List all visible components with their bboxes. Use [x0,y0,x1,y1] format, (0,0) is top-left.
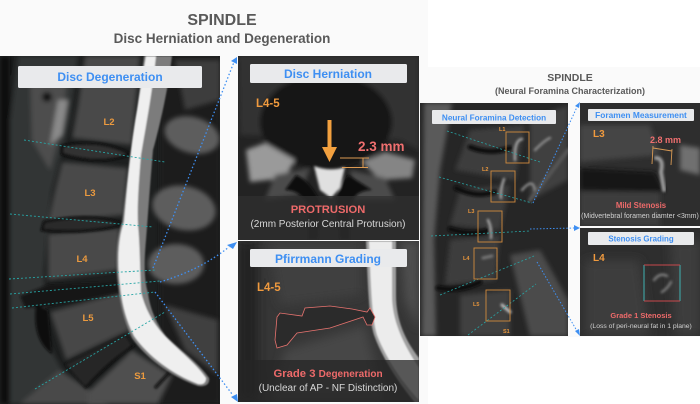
vertebrae [48,56,172,404]
vertebra labels: L5 [82,313,94,324]
caption: mild stenosis [581,201,699,220]
level labels: L1 [499,127,505,133]
main title: SPINDLE [187,12,257,29]
label: Stenosis Grading: Stenosis Grading [608,234,674,244]
main title [114,12,330,46]
panel: neural foramina MRI [420,103,568,336]
caption: grade 1 stenosis [590,311,692,330]
posterior elements [148,60,224,375]
arrows: disc panels [153,57,238,402]
caption: grade 3 [259,368,397,394]
vertebra labels: L3 [84,188,96,199]
caption: grade 1 stenosis: Grade 1 Stenosis [610,311,672,320]
measurement 2.3 mm: 2.3 mm [358,139,405,154]
caption: grade 3: Grade 3 Degeneration [273,368,383,380]
level labels [463,127,510,335]
level labels: L2 [482,167,488,173]
stenosis box [644,265,680,301]
dotted guide lines [431,131,540,335]
level label L4-5 sagittal: L4-5 [257,282,281,294]
right heading: SPINDLE [547,72,593,84]
panel: stenosis grading MRI [580,228,700,336]
caption: mild stenosis: (Midvertebral foramen diamter <3mm) [581,213,699,220]
label: Disc Degeneration: Disc Degeneration [57,70,163,84]
level labels: S1 [503,329,510,335]
vertebra labels: L4 [76,254,88,265]
panel: disc herniation axial MRI [238,56,419,240]
foramina boxes [474,132,529,321]
vertebra labels [76,117,147,382]
vertebra L3 [48,162,128,222]
measurement 2.3 mm [340,139,405,168]
panel: disc degeneration MRI [0,56,224,404]
level label L4-5 axial: L4-5 [256,98,280,110]
label: Foramen Measurement: Foramen Measurement [595,110,687,120]
disc outline [275,306,375,348]
level label L4: L4 [593,253,605,264]
caption: grade 3: (Unclear of AP - NF Distinction) [259,383,397,394]
panel: foramen measurement MRI [580,103,700,226]
caption: protrusion: (2mm Posterior Central Protrusion) [250,219,406,230]
right heading [495,72,645,96]
soft tissue [1,56,106,404]
label: Stenosis Grading [588,232,694,245]
label: Pfirrmann Grading: Pfirrmann Grading [275,252,381,266]
measurement 2.8 mm: 2.8 mm [650,135,681,145]
vertebra labels: S1 [134,371,147,382]
level label L3: L3 [593,129,605,140]
label: Disc Degeneration [18,66,202,88]
bottom caption band [238,196,419,240]
caption: protrusion [250,204,406,230]
label: Neural Foramina Detection: Neural Foramina Detection [442,114,546,122]
discs [20,143,170,388]
vertebra S1 [88,350,172,404]
caption: mild stenosis: Mild Stenosis [616,201,667,210]
vertebra L5 [50,292,130,360]
caption: protrusion: PROTRUSION [291,204,365,216]
label: Pfirrmann Grading [250,249,407,267]
level labels: L4 [463,256,470,262]
dotted guide lines [9,140,165,389]
bottom caption band [238,360,419,402]
label: Neural Foramina Detection [432,110,556,124]
label: Disc Herniation [250,64,407,83]
arrows: foramina panels [530,102,580,336]
level labels: L5 [473,302,479,308]
level labels: L3 [468,209,474,215]
spinal canal [116,56,209,386]
right heading: (Neural Foramina Characterization) [495,86,645,96]
panel: Pfirrmann grading MRI [238,241,419,404]
vertebra L4 [48,228,120,280]
main title: Disc Herniation and Degeneration [114,31,330,46]
label: Disc Herniation: Disc Herniation [284,67,372,81]
vertebra labels: L2 [103,117,115,128]
caption: grade 1 stenosis: (Loss of peri-neural fat in 1 plane) [590,323,692,330]
icon: orange arrow [322,120,337,162]
vertebra L2 [72,56,140,145]
